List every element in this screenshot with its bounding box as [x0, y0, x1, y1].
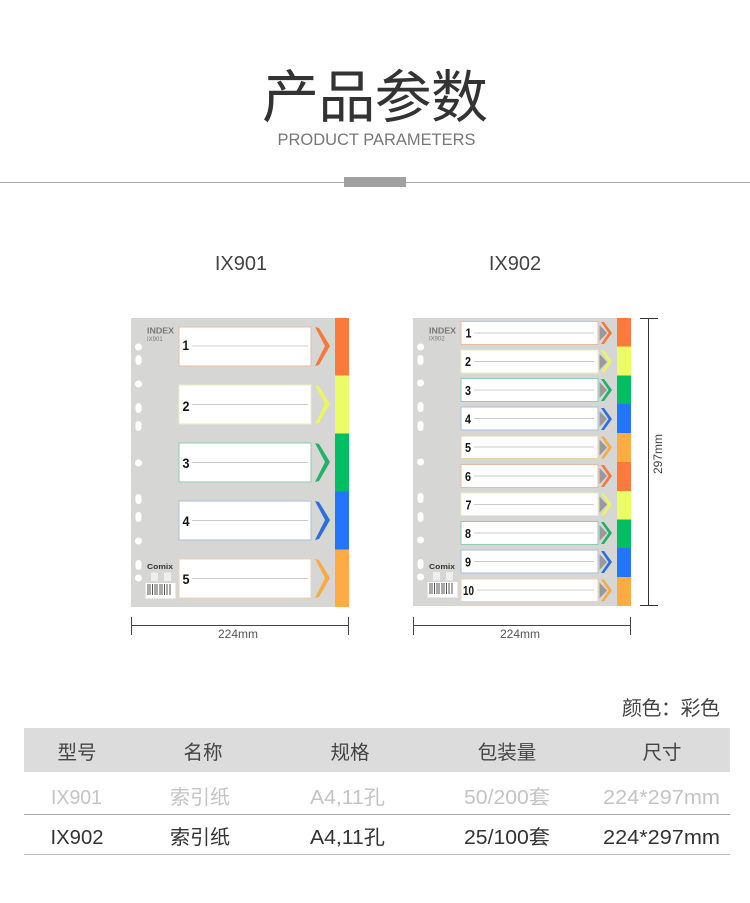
tab entry 1 [461, 322, 612, 344]
tab entry 2 [179, 385, 330, 424]
brand and barcode [146, 564, 176, 598]
tab entry 3 [461, 378, 612, 402]
table row IX901: 50/200套 [464, 786, 550, 809]
dimension: IX901 width: 224mm [218, 627, 258, 641]
tab entry 5: 5 [182, 571, 190, 587]
tab entry 4 [461, 407, 612, 430]
tab entry 3: 3 [465, 384, 471, 398]
color tabs IX901 [335, 318, 349, 607]
table header: 规格 [330, 742, 370, 764]
table [24, 728, 730, 855]
subtitle: PRODUCT PARAMETERS [278, 131, 476, 149]
tab entry 3: 3 [182, 455, 190, 471]
tab entry 6: 6 [465, 470, 471, 484]
tab entry 10: 10 [463, 584, 474, 598]
table row IX901: 224*297mm [603, 787, 720, 809]
model label IX902: IX902 [489, 253, 541, 275]
panel: IX901 divider sheet [131, 318, 335, 607]
model label IX901: IX901 [215, 253, 267, 275]
tab entry 2: 2 [465, 355, 471, 369]
table header: 名称 [183, 742, 223, 764]
tab entry 1: 1 [182, 337, 189, 353]
brand and barcode: Comix [147, 564, 173, 571]
tab entry 10 [461, 579, 612, 602]
punch holes [135, 344, 142, 582]
tab entry 8: 8 [465, 527, 471, 541]
tab entry 5 [179, 559, 330, 598]
index label: IX902 [429, 336, 445, 342]
index label [429, 326, 457, 342]
index label: INDEX [429, 326, 457, 336]
tab entry 6 [461, 464, 612, 488]
table row IX902: IX902 [50, 827, 104, 849]
index label: IX901 [147, 337, 163, 343]
table row IX901: IX901 [51, 787, 102, 809]
dimension: IX902 width [414, 617, 630, 641]
tab entry 5: 5 [465, 441, 471, 455]
tab entry 9 [461, 550, 612, 573]
tab entry 1: 1 [466, 326, 472, 340]
tab entry 4: 4 [182, 513, 190, 529]
table header: 型号 [57, 742, 97, 764]
table row IX902 [50, 826, 720, 849]
tab entry 2: 2 [182, 398, 190, 414]
header divider [0, 177, 750, 187]
tab entry 7 [461, 493, 612, 516]
table row IX901: A4,11孔 [310, 786, 385, 809]
dimension: IX902 height: 297mm [651, 434, 665, 474]
table row IX901: 索引纸 [170, 786, 230, 809]
tab entry 4: 4 [465, 412, 471, 426]
table row IX902: A4,11孔 [310, 826, 385, 849]
color tabs IX902 [617, 318, 631, 606]
tab entry 1 [179, 327, 330, 366]
title: 产品参数 [262, 66, 488, 130]
table row IX902: 224*297mm [603, 827, 720, 849]
table header [24, 728, 730, 772]
dimension: IX902 width: 224mm [500, 627, 540, 641]
brand and barcode: Comix [429, 564, 455, 571]
table row IX902: 索引纸 [170, 826, 230, 849]
dimension: IX901 width [132, 617, 348, 641]
index label [147, 326, 175, 343]
table row IX902: 25/100套 [464, 826, 550, 849]
punch holes [417, 344, 424, 580]
tab entry 8 [461, 522, 612, 544]
brand and barcode [428, 564, 458, 598]
tab entry 5 [461, 436, 612, 458]
panel: IX902 divider sheet [413, 318, 617, 606]
tab entry 3 [179, 443, 330, 482]
dimension: IX902 height [640, 318, 665, 606]
table row IX901 [51, 786, 720, 809]
index label: INDEX [147, 326, 175, 336]
table header: 包装量 [478, 742, 536, 764]
tab entry 2 [461, 350, 612, 373]
tab entry 9: 9 [465, 556, 471, 570]
table header: 尺寸 [642, 742, 682, 764]
tab entry 4 [179, 501, 330, 540]
color note: 颜色：彩色 [622, 697, 720, 720]
tab entry 7: 7 [466, 498, 472, 512]
